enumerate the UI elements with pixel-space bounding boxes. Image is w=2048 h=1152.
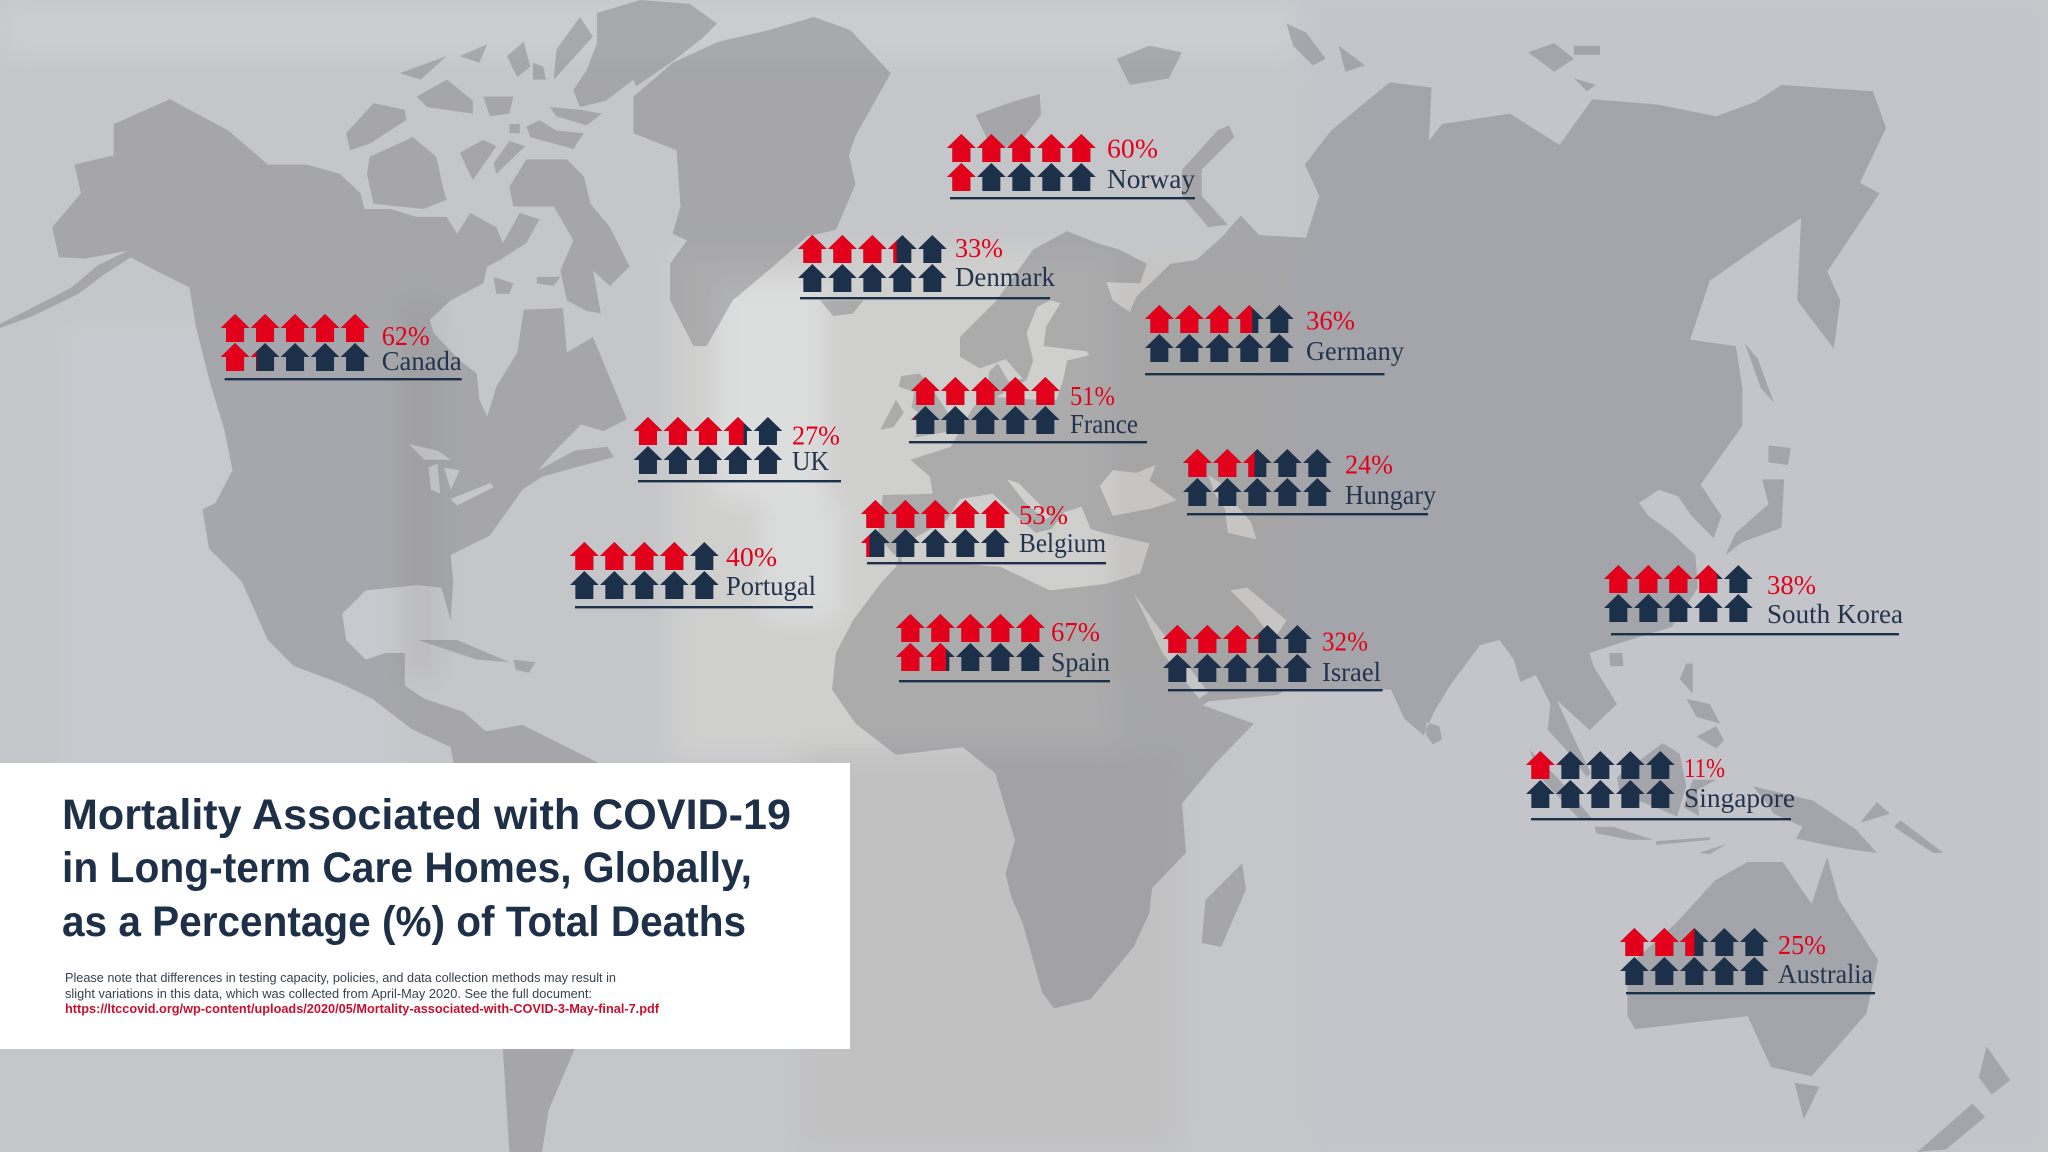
country: Hungary <box>1183 449 1436 515</box>
country: South Korea <box>1604 565 1903 635</box>
country: UK <box>634 417 841 482</box>
country: Norway <box>947 134 1195 199</box>
house icons: 62% filled <box>221 314 369 371</box>
country name: South Korea <box>1767 599 1903 629</box>
title: as a Percentage (%) of Total Deaths <box>62 898 746 946</box>
country: Australia <box>1620 928 1875 994</box>
percentage: 60% <box>1107 134 1158 164</box>
house icons: 38% filled <box>1604 565 1753 622</box>
country: Belgium <box>861 500 1106 564</box>
panel: title and note <box>0 763 850 1049</box>
country name: Norway <box>1107 164 1195 194</box>
country name: Spain <box>1051 647 1110 677</box>
country: Portugal <box>570 542 816 608</box>
percentage: 62% <box>382 321 430 351</box>
note text: https://ltccovid.org/wp-content/uploads/2020/05/Mortality-associated-with-COVID-3-May-final-7.pdf <box>65 1002 660 1016</box>
percentage: 38% <box>1767 570 1816 600</box>
note text: Please note that differences in testing capacity, policies, and data collection methods may result in <box>65 971 616 985</box>
title: Mortality Associated with COVID-19 <box>62 791 791 839</box>
house icons: 25% filled <box>1620 928 1769 985</box>
country: France <box>909 377 1147 443</box>
country name: Portugal <box>726 571 816 601</box>
country name: France <box>1070 409 1138 439</box>
percentage: 36% <box>1306 306 1355 336</box>
country: Spain <box>896 614 1110 682</box>
percentage: 11% <box>1684 753 1725 783</box>
country: Denmark <box>798 233 1055 299</box>
house icons: 32% filled <box>1163 625 1312 682</box>
country name: Germany <box>1306 336 1404 366</box>
country name: Hungary <box>1345 480 1436 510</box>
percentage: 53% <box>1019 500 1068 530</box>
house icons: 24% filled <box>1183 449 1332 506</box>
country name: Israel <box>1322 657 1381 687</box>
country name: Canada <box>382 346 462 376</box>
country name: UK <box>792 446 829 476</box>
percentage: 25% <box>1778 930 1826 960</box>
house icons: 27% filled <box>634 417 782 474</box>
house icons: 40% filled <box>570 542 719 599</box>
country: Germany <box>1145 305 1404 375</box>
percentage: 67% <box>1051 617 1100 647</box>
title <box>62 791 791 946</box>
country name: Denmark <box>955 262 1055 292</box>
country name: Singapore <box>1684 783 1795 813</box>
title: in Long-term Care Homes, Globally, <box>62 844 752 892</box>
note text <box>65 971 660 1016</box>
percentage: 33% <box>955 233 1003 263</box>
country name: Belgium <box>1019 528 1106 558</box>
country: Israel <box>1163 625 1383 691</box>
house icons: 51% filled <box>911 377 1060 434</box>
house icons: 67% filled <box>896 614 1045 671</box>
percentage: 24% <box>1345 450 1393 480</box>
percentage: 51% <box>1070 381 1115 411</box>
country: Singapore <box>1526 751 1795 820</box>
percentage: 32% <box>1322 626 1368 656</box>
house icons: 33% filled <box>798 235 947 292</box>
country name: Australia <box>1778 959 1873 989</box>
note text: slight variations in this data, which was collected from April-May 2020. See the full document: <box>65 987 592 1001</box>
percentage: 27% <box>792 420 840 450</box>
house icons: 11% filled <box>1526 751 1675 808</box>
house icons: 60% filled <box>947 134 1096 191</box>
percentage: 40% <box>726 542 777 572</box>
country: Canada <box>221 314 462 380</box>
house icons: 36% filled <box>1145 305 1294 362</box>
house icons: 53% filled <box>861 500 1010 557</box>
